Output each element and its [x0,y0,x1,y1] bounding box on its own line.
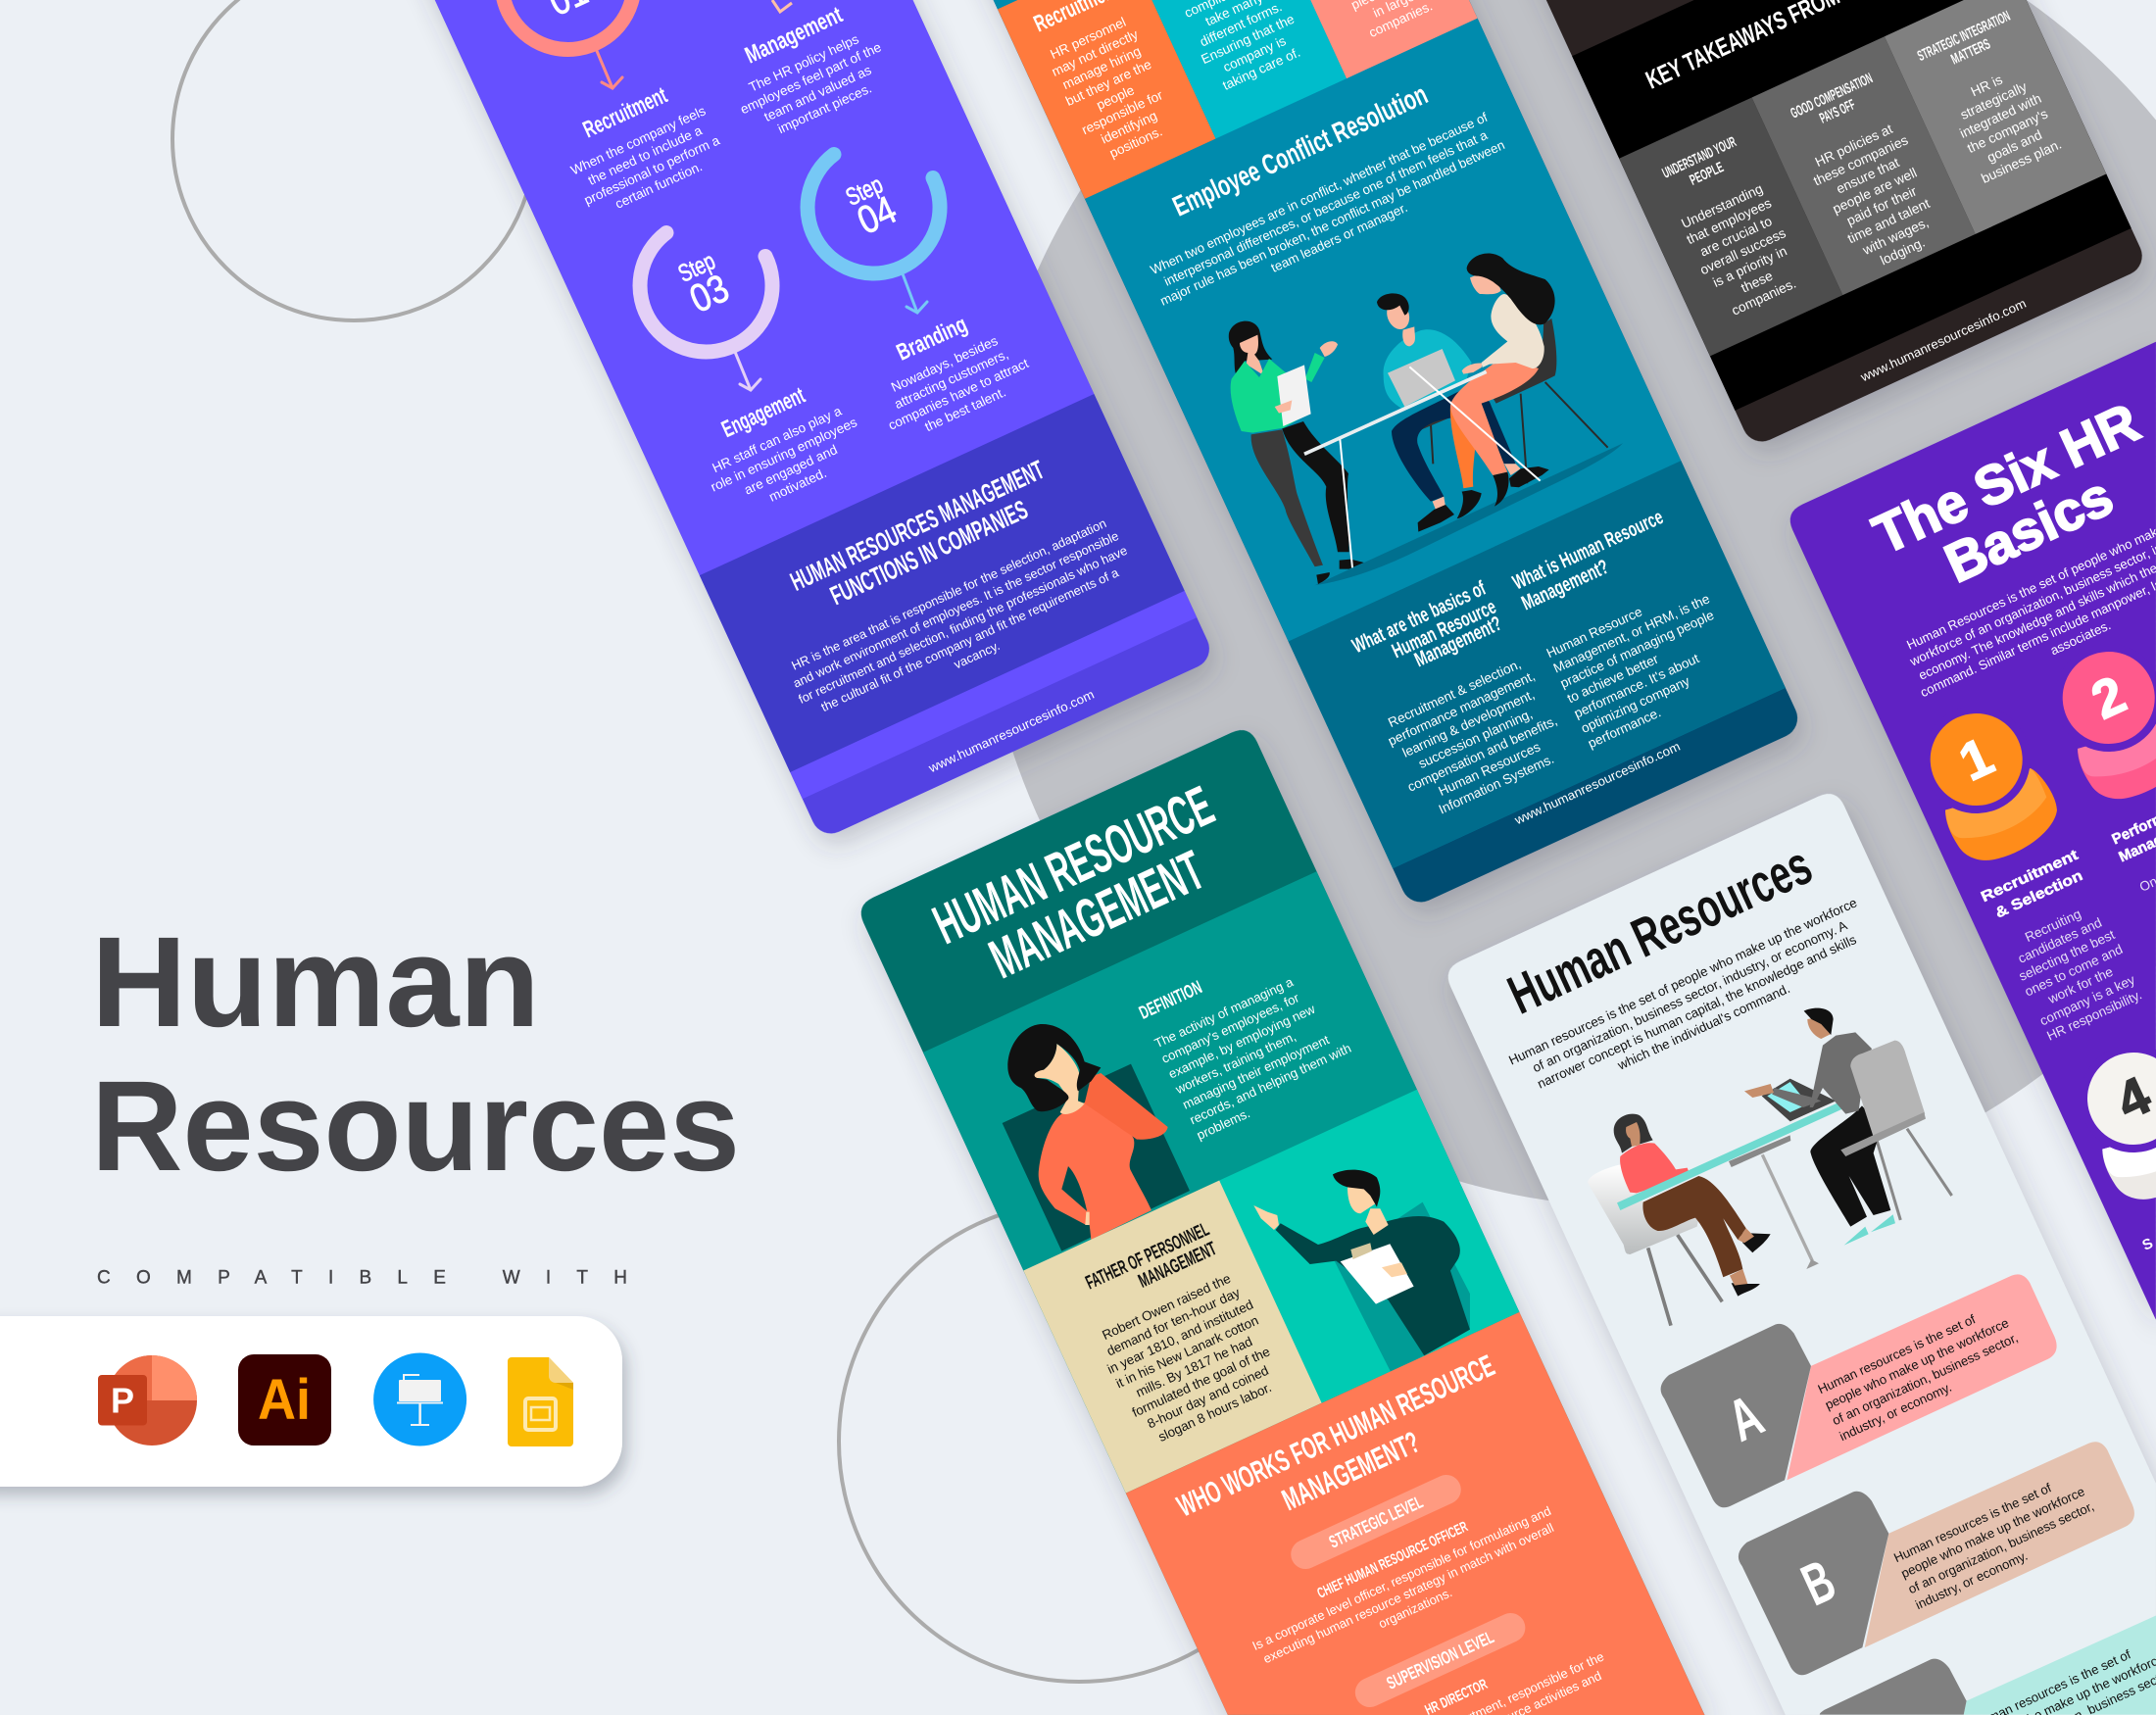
definition body: example, by employing new [1166,1001,1317,1081]
illustration: woman and man at desk [1588,1008,1952,1326]
row C tab [1820,1609,2156,1715]
row B text: of an organization, business sector, [1906,1498,2096,1596]
row B tab [1739,1442,2134,1675]
recruitment and selection body: Recruiting [2023,906,2083,945]
column 1 body: are crucial to [1697,213,1775,259]
what are the basics body: Recruitment & selection, [1386,656,1523,730]
HRM title: MANAGEMENT [981,839,1213,991]
employee conflict body: interpersonal differences, or because one of them feels that a [1161,126,1490,288]
icon: Illustrator [238,1354,331,1446]
chief officer text: Is a corporate level officer, responsible for formulating and [1250,1502,1553,1653]
badge 1 coin [1910,693,2042,826]
main title [91,909,740,1198]
column 3 body: goals and [1984,126,2044,165]
definition heading: DEFINITION [1136,977,1205,1024]
column 1 heading: UNDERSTAND YOUR [1660,133,1739,182]
supervision level pill [1350,1608,1530,1712]
father of personnel body: 8-hour day and coined [1145,1362,1271,1431]
chief officer text: CHIEF HUMAN RESOURCE OFFICER [1315,1518,1471,1602]
illustration: three colleagues at a table [1229,254,1623,585]
step 03 label: 03 [684,267,735,321]
compatible with label: COMPATIBLE WITH [97,1268,627,1288]
icon: PowerPoint: P [111,1380,134,1421]
six basics base [1785,342,2156,1320]
takeaways url: www.humanresourcesinfo.com [1857,296,2029,385]
column 3 heading [1915,8,2013,68]
father of personnel heading [1083,1219,1220,1294]
recruitment and selection heading: Recruitment [1979,847,2081,906]
management body: important pieces. [775,80,873,136]
column 2 heading: PAYS OFF [1817,96,1858,127]
recruitment heading: Recruitment [579,82,671,143]
employee conflict body: When two employees are in conflict, whether that be because of [1148,109,1490,277]
row B letter: B [1792,1547,1844,1618]
illustration: woman and man [1003,1024,1470,1374]
panel: employee conflict card [960,0,1804,908]
branding heading: Branding [893,311,971,367]
column 3 body: integrated with [1957,90,2043,140]
column 3 body: business plan. [1979,136,2064,185]
definition body: problems. [1195,1105,1251,1143]
definition body: company's employees, for [1159,990,1301,1065]
column 2 heading: GOOD COMPENSATION [1788,70,1875,122]
father of personnel body: it in his New Lanark cotton [1113,1312,1260,1391]
recruitment and selection body: company is a key [2037,971,2137,1028]
what are the basics body: performance management, [1386,668,1537,748]
definition body: The activity of managing a [1152,974,1296,1051]
badge 2 cylinder [2078,707,2156,799]
row A text: of an organization, business sector, [1830,1330,2020,1428]
row B text: Human resources is the set of [1891,1480,2054,1565]
column 1 body: overall success [1697,225,1788,277]
outline circle bottom [839,1201,1319,1682]
icon: Google Slides [508,1357,573,1446]
six basics intro: associates. [2048,617,2113,658]
compliance column text: different forms. [1198,0,1284,49]
what are the basics body: learning & development, [1399,686,1537,760]
engagement body: are engaged and [742,442,840,497]
badge 1 coin: 1 [1951,726,2002,793]
main title: Human [91,909,540,1054]
engagement body: HR staff can also play a [710,403,844,475]
recruitment column text: responsible for [1079,87,1165,137]
recruitment column text: but they are the [1063,56,1153,109]
recruitment column text: HR personnel [1048,14,1128,62]
strategic level pill [1286,1470,1466,1574]
column 2 body: lodging. [1878,234,1927,268]
recruitment column text: identifying [1099,108,1159,146]
column 2 body: ensure that [1834,155,1901,196]
strategic level pill: STRATEGIC LEVEL [1326,1492,1426,1552]
badge 1 [1910,693,2057,860]
engagement body: role in ensuring employees [709,415,859,494]
icon: Illustrator: Ai [258,1368,311,1432]
large grey background circle [979,0,2156,1207]
column 2 body: these companies [1811,132,1910,188]
purple card bands [330,0,1215,840]
column 1 body: Understanding [1679,180,1765,231]
step 04 label [842,171,903,243]
column 2 body: people are well [1831,165,1919,217]
column 2 body: time and talent [1845,195,1932,246]
management body: team and valued as [761,62,873,123]
light card intro: which the individual's command. [1614,980,1791,1073]
chief officer text: executing human resource strategy in match with overall [1260,1520,1556,1666]
badge 2 coin [2042,631,2156,764]
what are the basics body: succession planning, [1416,706,1535,771]
badge 4 [2067,1032,2156,1200]
row B text: industry, or economy. [1913,1547,2030,1612]
step 03 label [674,247,735,321]
recruitment and selection heading: & Selection [1992,867,2085,921]
branding body: Nowadays, besides [889,332,1000,394]
functions heading [786,455,1049,611]
column 3 body: strategically [1958,78,2029,122]
step 04 ring [808,155,940,313]
what are the basics body: Information Systems. [1436,751,1556,816]
badge 2 [2042,631,2156,799]
father of personnel heading: MANAGEMENT [1135,1238,1220,1293]
column 3 body: HR is [1969,72,2005,99]
management body: The HR policy helps [747,31,861,94]
what is HRM body: performance. It's about [1572,651,1701,720]
what is HRM heading [1509,506,1667,614]
functions body: for recruitment and selection, finding the professionals who have [796,542,1129,707]
icon: PowerPoint [98,1355,197,1446]
recruitment and selection heading [1979,847,2085,921]
functions body: HR is the area that is responsible for the selection, adaptation [789,515,1108,672]
column 1 body: is a priority in [1710,243,1788,290]
chief officer text: organizations. [1376,1585,1454,1631]
who works heading: MANAGEMENT? [1277,1425,1425,1517]
step 04 label: 04 [852,188,903,243]
definition body: managing their employment [1180,1032,1332,1111]
light card intro: Human resources is the set of people who make up the workforce [1506,895,1859,1067]
recruitment column text: manage hiring [1060,43,1143,92]
employee conflict body: team leaders or manager. [1268,199,1409,274]
what is HRM body: Human Resource [1544,604,1644,661]
column 1 body: that employees [1684,195,1774,247]
definition body: records, and helping them with [1187,1040,1353,1127]
recruitment and selection body: candidates and [2016,914,2104,965]
main title: Resources [91,1054,740,1198]
branding body: the best talent. [922,384,1007,434]
functions body: the cultural fit of the company and fit the requirements of a [818,564,1121,714]
row A [1661,1274,2057,1507]
HRM card lower bands [1023,1090,1705,1715]
recruitment body: professional to perform a [582,132,722,208]
light card intro: of an organization, business sector, industry, or economy. A [1530,917,1849,1075]
engagement heading: Engagement [717,382,809,443]
what are the basics heading: Management? [1411,612,1505,671]
recruitment body: the need to include a [586,122,705,187]
recruitment and selection body: work for the [2044,963,2115,1006]
functions heading: FUNCTIONS IN COMPANIES [826,495,1032,611]
row A tab [1661,1274,2057,1507]
conflict card url: www.humanresourcesinfo.com [1511,739,1683,828]
step 04 label: Step [842,171,887,212]
father of personnel body: slogan 8 hours labor. [1155,1379,1274,1444]
badge 4 coin [2067,1032,2156,1165]
column 3 body: the company's [1965,106,2050,156]
father of personnel heading: FATHER OF PERSONNEL [1083,1219,1212,1294]
column 2 heading [1788,70,1875,127]
outline circle top left [172,0,535,320]
partial heading: S [2139,1235,2156,1254]
what is HRM body: to achieve better [1565,651,1661,706]
what are the basics body: compensation and benefits, [1405,712,1559,794]
what are the basics heading [1348,577,1505,671]
who works heading [1172,1348,1499,1523]
what is HRM heading: Management? [1518,556,1612,614]
branding body: attracting customers, [892,346,1010,412]
column 1 body: these [1739,268,1775,295]
functions heading: HUMAN RESOURCES MANAGEMENT [786,455,1049,597]
recruitment body: certain function. [612,159,705,211]
father of personnel body: Robert Owen raised the [1100,1270,1233,1343]
recruitment body: When the company feels [568,103,708,177]
employee conflict body: major rule has been broken, the conflict may be handled between [1157,137,1506,308]
compliance column text: company is [1221,32,1288,74]
light card title: Human Resources [1499,834,1821,1025]
six basics title: The Six HR [1864,391,2148,565]
compliance column text: Ensuring that the [1199,11,1297,67]
six basics title: Basics [1936,465,2122,594]
row C [1820,1609,2156,1715]
recruitment and selection body: ones to come and [2023,941,2125,999]
badge 4 cylinder [2102,1107,2156,1200]
row B [1739,1442,2134,1675]
conflict card bands [960,0,1804,908]
father of personnel body: formulated the goal of the [1130,1344,1272,1420]
recruitment and selection body: selecting the best [2017,927,2117,983]
what is HRM body: Management, or HRM, is the [1551,591,1712,675]
column 2 body: with wages, [1859,215,1931,258]
light card intro: narrower concept is human capital, the knowledge and skills [1535,931,1859,1091]
column 2 body: paid for their [1844,183,1919,228]
panel: purple steps card [330,0,1215,840]
compliance column text: taking care of. [1220,44,1302,93]
recruitment column text [1030,0,1181,168]
what are the basics heading: Human Resource [1389,596,1499,662]
father of personnel body: demand for ten-hour day [1104,1285,1243,1358]
recruitment column text: may not directly [1050,26,1141,78]
what is HRM body: performance. [1586,705,1663,751]
row A text: Human resources is the set of [1815,1311,1978,1396]
what are the basics body: Human Resources [1436,739,1543,799]
column 1 body: companies. [1729,275,1798,318]
what is HRM body: practice of managing people [1558,608,1716,691]
who works heading: WHO WORKS FOR HUMAN RESOURCE [1172,1348,1499,1523]
recruitment and selection body: HR responsibility. [2044,987,2144,1043]
takeaways bands [1465,0,2148,448]
row B text: people who make up the workforce [1898,1484,2086,1581]
purple card url: www.humanresourcesinfo.com [925,687,1097,776]
column 2 body: HR policies at [1813,121,1894,170]
panel: light human resources card [1443,788,2156,1715]
badge 1 cylinder [1945,768,2057,860]
father of personnel body: in year 1810, and instituted [1104,1297,1255,1376]
management body: employees feel part of the [738,39,883,117]
recruitment column text: people [1094,82,1137,113]
row A text: people who make up the workforce [1823,1315,2011,1412]
supervision level pill: SUPERVISION LEVEL [1384,1627,1496,1693]
what are the basics heading: What are the basics of [1348,577,1490,658]
panel: key takeaways card [1465,0,2148,448]
light card base [1443,788,2156,1715]
arrow to management [772,0,792,12]
column 3 heading: MATTERS [1948,36,1993,68]
HRM title: HUMAN RESOURCE [924,774,1223,956]
white icon bar [0,1316,622,1487]
functions body: and work environment of employees. It is the sector responsible [791,528,1121,690]
column 1 heading [1660,133,1739,189]
functions body: vacancy. [952,638,1002,671]
badge 2 coin: 2 [2083,664,2134,731]
icon: Keynote [373,1352,466,1446]
engagement body: motivated. [766,465,828,504]
employee conflict heading: Employee Conflict Resolution [1168,79,1433,222]
father of personnel body: mills. By 1817 he had [1133,1334,1254,1399]
branding body: companies have to attract [886,355,1031,432]
what is HRM body: optimizing company [1579,673,1691,736]
step 03 ring [640,233,772,390]
definition body: workers, training them, [1172,1028,1298,1097]
row A letter: A [1718,1382,1773,1454]
recruitment column text: positions. [1107,123,1164,161]
step 03 label: Step [674,247,719,288]
what is HRM heading: What is Human Resource [1509,506,1667,594]
HRM card upper bands [856,724,1705,1715]
panel: human resource management card [856,724,1705,1715]
step 01 ring [502,0,634,88]
column 1 heading: PEOPLE [1688,159,1726,189]
row A text: industry, or economy. [1837,1379,1953,1444]
HRM title [924,774,1223,991]
panel: six HR basics card [1785,342,2156,1320]
